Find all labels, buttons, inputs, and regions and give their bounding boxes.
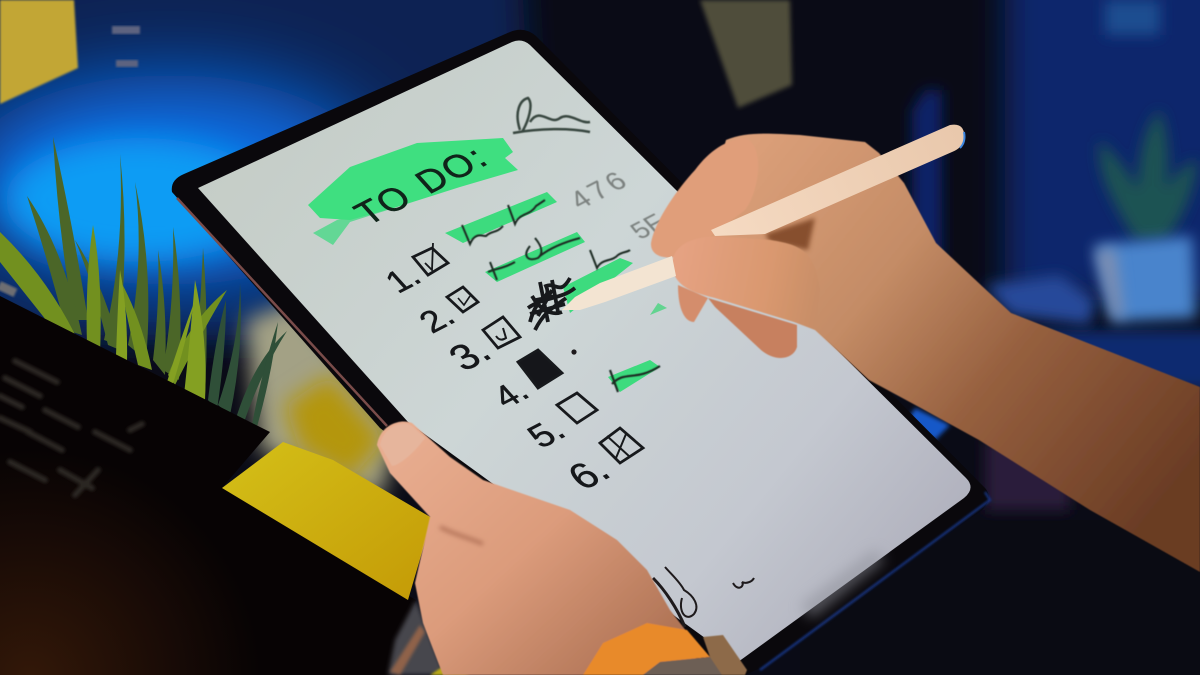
tablet (172, 30, 990, 675)
list: numbers: 1. (378, 259, 429, 300)
screen shadow bottom (800, 550, 885, 618)
tablet metal edge highlight (177, 198, 387, 426)
back of hand and forearm (700, 134, 1200, 572)
list: numbers: 5. (519, 411, 573, 455)
laptop hinge (0, 281, 17, 297)
list item strokes (462, 200, 660, 392)
stylus pen (562, 125, 964, 310)
right arm and hand (651, 134, 1200, 572)
heading: TO DO: TO DO: (346, 138, 496, 232)
scribbled-out item (528, 278, 575, 330)
plant on the left (0, 137, 287, 430)
bottom scribbles (572, 350, 754, 627)
watch band (583, 623, 710, 675)
index finger (651, 138, 758, 258)
shadow under pen (765, 218, 815, 250)
scribble top (513, 98, 590, 133)
thumb crease (440, 527, 483, 544)
middle finger (672, 236, 820, 330)
sticky note: yellow (222, 442, 432, 600)
small fingertip (678, 285, 708, 322)
list: numbers (378, 259, 619, 498)
palm and thumb (377, 421, 700, 675)
screen blue edge glow (760, 492, 990, 670)
list: numbers: 6. (560, 450, 619, 498)
ring finger (708, 298, 797, 358)
handwritten numbers top right: 5F (624, 208, 671, 244)
list: numbers: 3. (441, 331, 500, 379)
highlights: list entries (445, 192, 667, 392)
list: check boxes (413, 243, 643, 463)
watch underside (643, 657, 722, 675)
highlight: title (308, 138, 518, 245)
watch clasp (703, 635, 747, 675)
keyboard keys (0, 361, 142, 495)
laptop (0, 281, 416, 675)
list: numbers: 4. (486, 374, 537, 415)
blurred yellow and pale object behind plant (245, 300, 400, 500)
thumbnail (380, 424, 425, 466)
blurred objects below the hand (388, 600, 470, 675)
handwritten numbers top right: 476 (563, 164, 636, 214)
tablet screen (198, 41, 971, 662)
handwritten numbers top right (563, 164, 671, 244)
background objects: sticky note, wall paper, potted plant (0, 0, 1198, 440)
list: numbers: 2. (412, 299, 463, 340)
tablet body (172, 30, 989, 675)
left hand (377, 421, 747, 675)
